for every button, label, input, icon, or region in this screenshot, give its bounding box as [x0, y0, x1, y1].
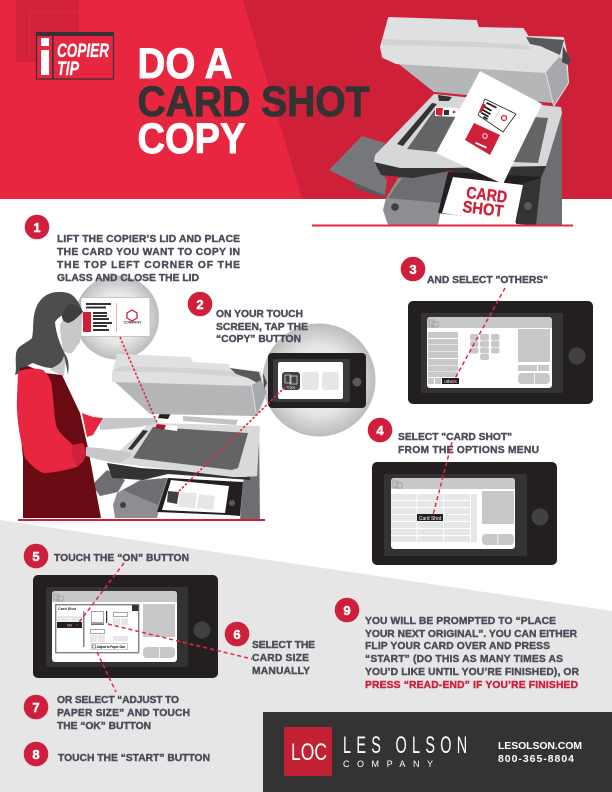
- magnifier: copy button: [262, 324, 376, 436]
- red rule under header copier: [312, 224, 573, 226]
- step 8 text: TOUCH THE “START” BUTTON: [58, 753, 210, 764]
- dashed pointer: others: [453, 288, 505, 382]
- contact details: 800-365-8804: [498, 753, 574, 765]
- step 9 text: PRESS “READ-END” IF YOU’RE FINISHED: [365, 680, 578, 691]
- header banner: [0, 0, 612, 199]
- title: COPY: [138, 116, 246, 163]
- step 1 badge: 1: [33, 220, 41, 235]
- illustration: woman using copier: [15, 292, 158, 518]
- company name: COMPANY: [343, 759, 433, 769]
- step 3 text: AND SELECT "OTHERS": [427, 275, 548, 286]
- dashed pointer: adjust to paper size: [97, 652, 116, 692]
- copier tip badge: COPIER: [57, 41, 109, 62]
- step 6 badge: 6: [233, 627, 241, 642]
- title: DO A: [138, 41, 232, 88]
- step 7 text: THE “OK” BUTTON: [57, 721, 151, 732]
- illustration: header copier: SHOT: [462, 198, 504, 221]
- step 9 text: YOUR NEXT ORIGINAL”. YOU CAN EITHER: [365, 629, 578, 640]
- step 9 badge: 9: [343, 603, 351, 618]
- step 9 text: [365, 616, 580, 691]
- dashed pointer: card shot: [433, 442, 452, 515]
- dashed pointer: on button: [77, 563, 124, 625]
- dashed pointer: card on glass: [120, 337, 158, 425]
- step 9 text: YOU WILL BE PROMPTED TO “PLACE: [365, 616, 556, 627]
- step 4 badge: [368, 418, 392, 442]
- touchscreen: others: others: [444, 379, 457, 384]
- step 9 text: FLIP YOUR CARD OVER AND PRESS: [365, 641, 550, 652]
- step 6 text: CARD SIZE: [252, 653, 309, 664]
- step 5 badge: 5: [32, 549, 40, 564]
- title: CARD SHOT: [138, 79, 370, 126]
- step 6 text: SELECT THE: [252, 640, 315, 651]
- illustration: header copier: CARD: [465, 184, 508, 207]
- step 4 text: FROM THE OPTIONS MENU: [398, 445, 539, 456]
- company name: LES OLSON: [343, 732, 467, 759]
- dashed pointer: copy button: [177, 387, 285, 493]
- step 4 text: SELECT "CARD SHOT": [398, 432, 512, 443]
- step 1 text: LIFT THE COPIER’S LID AND PLACE: [57, 234, 240, 245]
- step 7 badge: [24, 695, 48, 719]
- step 5 text: TOUCH THE “ON” BUTTON: [54, 553, 189, 564]
- touchscreen: others: [408, 301, 593, 404]
- step 2 badge: 2: [196, 297, 204, 312]
- magnifier: card on glass: COMPANY: [124, 320, 142, 324]
- step 2 text: SCREEN, TAP THE: [216, 322, 308, 333]
- step 4 text: [398, 432, 539, 456]
- contact details: [498, 740, 582, 765]
- touchscreen: card shot option: [372, 462, 557, 565]
- step 7 text: [57, 695, 190, 732]
- step 1 badge: [25, 215, 49, 239]
- touchscreen: card size settings: Adjust to Paper Size: [96, 645, 126, 649]
- step 1 text: GLASS AND CLOSE THE LID: [57, 273, 199, 284]
- red rule under copier: [18, 519, 265, 521]
- step 3 badge: 3: [409, 262, 417, 277]
- step 1 text: THE CARD YOU WANT TO COPY IN: [57, 247, 240, 258]
- step 6 badge: [225, 622, 249, 646]
- copier tip badge: [36, 32, 114, 80]
- magnifier: card on glass: [75, 276, 159, 360]
- step 8 badge: [24, 742, 48, 766]
- step 9 badge: [335, 598, 359, 622]
- touchscreen: card shot option: Card Shot: [419, 516, 442, 522]
- logo: LOC square: LOC: [291, 739, 327, 766]
- step 6 text: MANUALLY: [252, 666, 310, 677]
- touchscreen: card size settings: Card Shot: [58, 607, 77, 611]
- footer bar: [263, 712, 612, 792]
- step 2 text: “COPY” BUTTON: [216, 334, 301, 345]
- step 5 badge: [24, 544, 48, 568]
- illustration: copier in use: [92, 355, 267, 520]
- touchscreen: card size settings: On: [67, 624, 72, 628]
- illustration: header copier: [329, 18, 571, 225]
- lower grey background panel: [0, 520, 612, 792]
- step 9 text: YOU’D LIKE UNTIL YOU’RE FINISHED), OR: [365, 667, 580, 678]
- copier tip badge: TIP: [57, 59, 79, 80]
- step 7 text: OR SELECT “ADJUST TO: [57, 695, 179, 706]
- step 1 text: THE TOP LEFT CORNER OF THE: [57, 260, 240, 271]
- step 1 text: [57, 234, 240, 284]
- step 3 badge: [401, 257, 425, 281]
- step 2 text: [216, 309, 308, 345]
- touchscreen: card size settings: [33, 575, 218, 678]
- step 2 text: ON YOUR TOUCH: [216, 309, 303, 320]
- logo: LOC square: [284, 727, 332, 776]
- step 6 text: [252, 640, 315, 677]
- touchscreen: card size settings: Off: [67, 618, 73, 622]
- step 9 text: “START” (DO THIS AS MANY TIMES AS: [365, 654, 563, 665]
- step 7 text: PAPER SIZE” AND TOUCH: [57, 708, 190, 719]
- step 7 badge: 7: [32, 700, 40, 715]
- dashed pointer: card size: [108, 624, 252, 659]
- title: [138, 41, 370, 163]
- contact details: LESOLSON.COM: [498, 740, 582, 752]
- magnifier: copy button: Copy: [287, 386, 295, 390]
- step 8 badge: 8: [32, 747, 40, 762]
- step 4 badge: 4: [376, 423, 384, 438]
- step 2 badge: [188, 292, 212, 316]
